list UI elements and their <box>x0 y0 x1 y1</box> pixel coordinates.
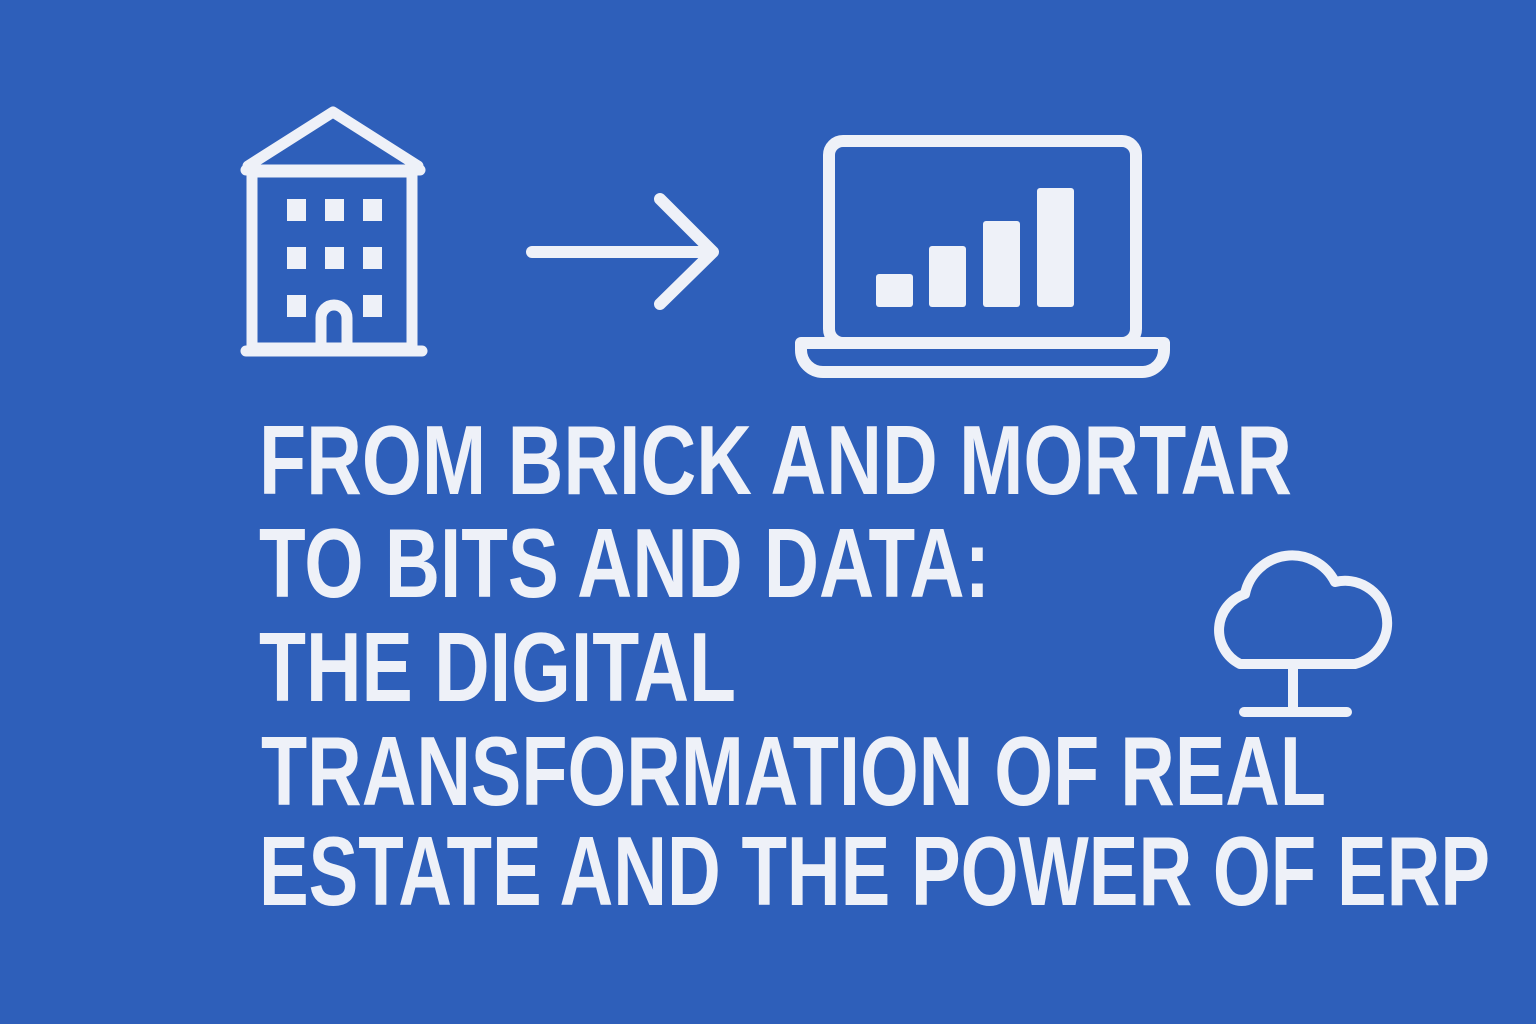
title <box>259 405 1490 926</box>
icon: cloud <box>1219 555 1387 712</box>
arrow <box>532 199 713 304</box>
title: THE DIGITAL <box>259 612 736 722</box>
title: TO BITS AND DATA: <box>259 508 990 618</box>
icon: laptop with bar chart <box>801 141 1164 372</box>
title: FROM BRICK AND MORTAR <box>259 405 1292 515</box>
icon: building <box>246 112 422 351</box>
